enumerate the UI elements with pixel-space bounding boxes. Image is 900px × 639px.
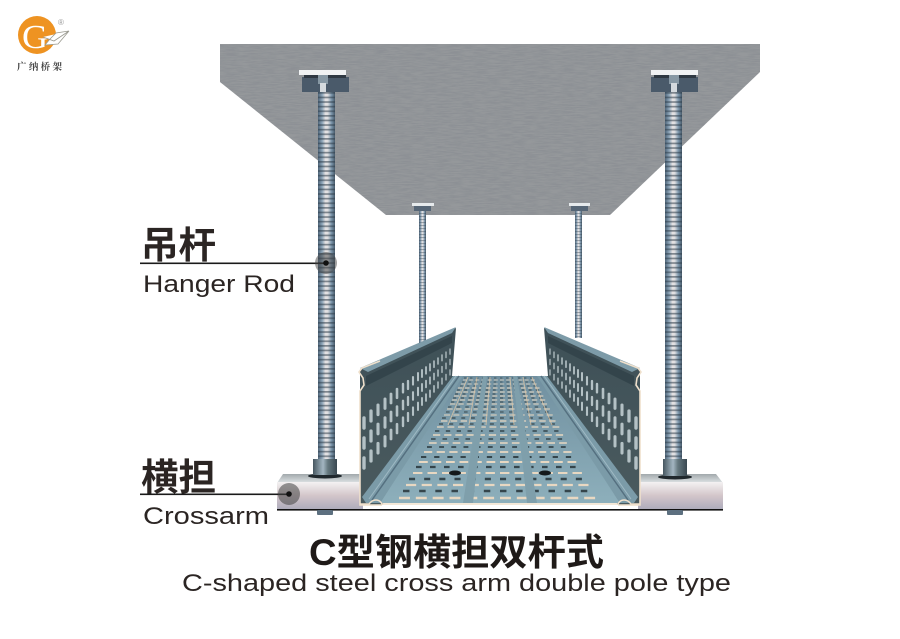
plain longitudinal strips (463, 376, 487, 503)
label: crossarm (140, 457, 300, 530)
inner hanger rod right (569, 203, 590, 338)
logo (17, 16, 69, 73)
crossarm (277, 474, 723, 511)
logo: registered mark: ® (58, 18, 64, 27)
top clamp (299, 70, 349, 92)
upper wall shading (366, 336, 452, 386)
crossarm bottom edge (277, 509, 723, 511)
crossarm left section (277, 474, 363, 509)
ceiling slab (220, 44, 760, 215)
front beige edge (359, 361, 382, 505)
floor round holes (403, 378, 597, 491)
beige longitudinal ribs (448, 377, 552, 425)
heading: 吊杆: 吊杆 (141, 225, 216, 266)
infographic canvas (17, 16, 760, 596)
English subtitle: C-shaped steel cross arm double pole type (182, 570, 731, 597)
marker dot (315, 252, 337, 274)
floor slot rows (399, 380, 601, 498)
caption: Hanger Rod: Hanger Rod (143, 271, 295, 298)
inner hanger rod left (412, 203, 434, 344)
heading: 横担: 横担 (141, 457, 216, 498)
C-shaped cable tray (359, 327, 641, 505)
marker dot (278, 483, 300, 505)
leader line (140, 494, 290, 495)
leader line (140, 262, 326, 264)
lower bolt end (317, 510, 333, 515)
right side wall (535, 327, 641, 505)
threaded shaft (665, 90, 682, 465)
logo: company name: 广纳桥架 (17, 59, 62, 73)
nut (658, 459, 692, 480)
crossarm right section (638, 474, 723, 509)
left side wall (359, 327, 465, 505)
left outer hanger rod (299, 70, 349, 515)
threaded shaft (318, 90, 335, 465)
Chinese title: C型钢横担双杆式 (309, 532, 604, 573)
label: hanger rod (140, 225, 337, 298)
nut (308, 459, 342, 478)
logo: bird wing (43, 31, 69, 45)
top lip (360, 327, 456, 372)
floor bolts (449, 470, 551, 476)
bottom slope (362, 376, 465, 503)
perforated floor (360, 376, 640, 504)
right outer hanger rod (651, 70, 698, 515)
lower bolt end (667, 510, 683, 515)
wall perforations (364, 349, 450, 468)
top clamp (651, 70, 698, 92)
bottom beige edge (360, 500, 640, 504)
logo: G letter: G (22, 19, 48, 56)
logo: orange circle (18, 16, 56, 54)
caption: Crossarm: Crossarm (143, 503, 269, 530)
title (182, 532, 731, 597)
